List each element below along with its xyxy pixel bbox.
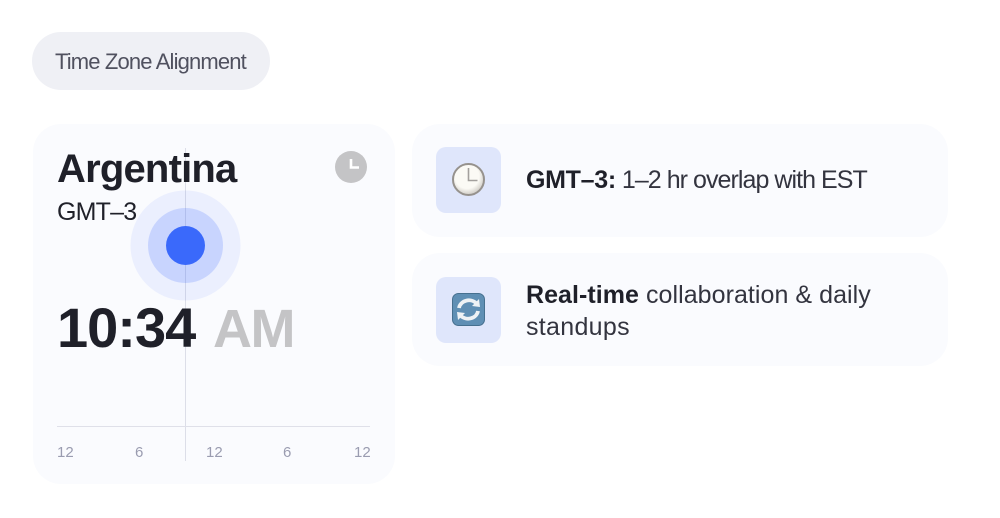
icon: refresh emoji bbox=[436, 277, 501, 343]
panel: real-time collaboration bbox=[412, 253, 948, 366]
timeline axis bbox=[57, 426, 370, 427]
text: real-time collaboration: Real-time collaboration & daily bbox=[526, 281, 871, 309]
timeline tick labels: 12 bbox=[206, 444, 223, 461]
text: GMT-3 overlap: GMT–3: 1–2 hr overlap with EST bbox=[526, 166, 867, 194]
location marker bbox=[130, 190, 240, 300]
panel: Argentina clock bbox=[33, 124, 395, 484]
icon: grey clock bbox=[335, 151, 367, 183]
panel: GMT-3 overlap bbox=[412, 124, 948, 237]
timeline tick labels: 6 bbox=[283, 444, 291, 461]
timeline tick labels: 12 bbox=[57, 444, 74, 461]
timeline tick labels: 6 bbox=[135, 444, 143, 461]
time: 10:34: 10:34 bbox=[57, 296, 195, 359]
timeline tick labels: 12 bbox=[354, 444, 371, 461]
tag: Time Zone Alignment bbox=[32, 32, 270, 90]
heading: Argentina: Argentina bbox=[57, 147, 236, 191]
text: real-time collaboration bbox=[526, 281, 871, 341]
vertical time line bbox=[185, 148, 186, 461]
time suffix: AM: AM bbox=[213, 299, 294, 359]
text: real-time collaboration: standups bbox=[526, 313, 630, 341]
tag label: Time Zone Alignment bbox=[55, 49, 246, 74]
icon: clock emoji bbox=[436, 147, 501, 213]
subheading: GMT-3: GMT–3 bbox=[57, 198, 136, 226]
